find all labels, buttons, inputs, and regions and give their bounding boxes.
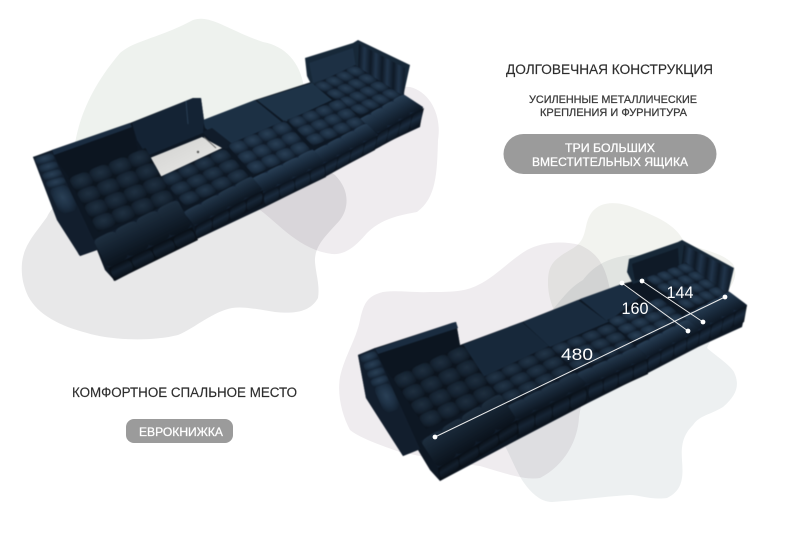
dimension: 144: 144: [666, 283, 694, 302]
right back unit: [305, 40, 410, 97]
left armrest: [358, 348, 420, 456]
left armrest: [33, 151, 98, 256]
blobs behind bottom sofa: [339, 203, 737, 502]
blob: gray: [22, 156, 347, 339]
blob: lavender: [252, 87, 439, 254]
dimension: 480: [433, 295, 727, 439]
dimension: 160: 160: [622, 299, 648, 318]
dimension: 160: [620, 281, 690, 333]
heading: comfortable sleeping place: КОМФОРТНОЕ СПАЛЬНОЕ МЕСТО: [72, 385, 297, 400]
seat 1: [68, 148, 198, 281]
text: reinforced fittings: УСИЛЕННЫЕ МЕТАЛЛИЧЕСКИЕ: [529, 94, 697, 106]
blob: beige: [548, 203, 735, 330]
blobs behind top sofa: [22, 19, 439, 339]
text: reinforced fittings: КРЕПЛЕНИЯ И ФУРНИТУРА: [540, 107, 688, 119]
right back unit: [627, 240, 734, 294]
bottom sofa: [358, 240, 747, 481]
heading: durable construction: ДОЛГОВЕЧНАЯ КОНСТРУКЦИЯ: [506, 62, 713, 77]
seat 2: [483, 346, 587, 438]
flat cushions: [462, 284, 640, 377]
seat 5: [313, 65, 424, 150]
seat 2: [160, 148, 263, 240]
left back: [52, 123, 138, 178]
blob: lavender: [339, 243, 610, 478]
seat 1: [392, 345, 519, 481]
blob: green: [72, 19, 304, 193]
seat 4: [287, 98, 378, 178]
seat 4: [607, 298, 700, 372]
seat 5: [645, 262, 747, 347]
badge: three drawers: [504, 134, 716, 174]
badge: three drawers: ВМЕСТИТЕЛЬНЫХ ЯЩИКА: [532, 157, 688, 169]
open drawer: [145, 128, 235, 177]
blob: blue gray: [499, 255, 737, 502]
silhouette base: [33, 68, 423, 281]
dimension lines: [433, 279, 727, 439]
seat 3: [227, 120, 326, 207]
dimension: 144: [640, 279, 705, 324]
badge: eurobook: ЕВРОКНИЖКА: [139, 427, 223, 439]
badge: three drawers: ТРИ БОЛЬШИХ: [565, 143, 655, 155]
seat 3: [550, 323, 648, 401]
lifted back cushion: [132, 98, 204, 156]
top sofa: [33, 40, 424, 281]
text: reinforced fittings: [529, 94, 697, 119]
left back: [375, 322, 460, 378]
dimension: 480: 480: [561, 345, 593, 364]
silhouette base: [358, 267, 747, 481]
badge: eurobook: [126, 419, 233, 443]
flat cushions: [203, 83, 332, 145]
